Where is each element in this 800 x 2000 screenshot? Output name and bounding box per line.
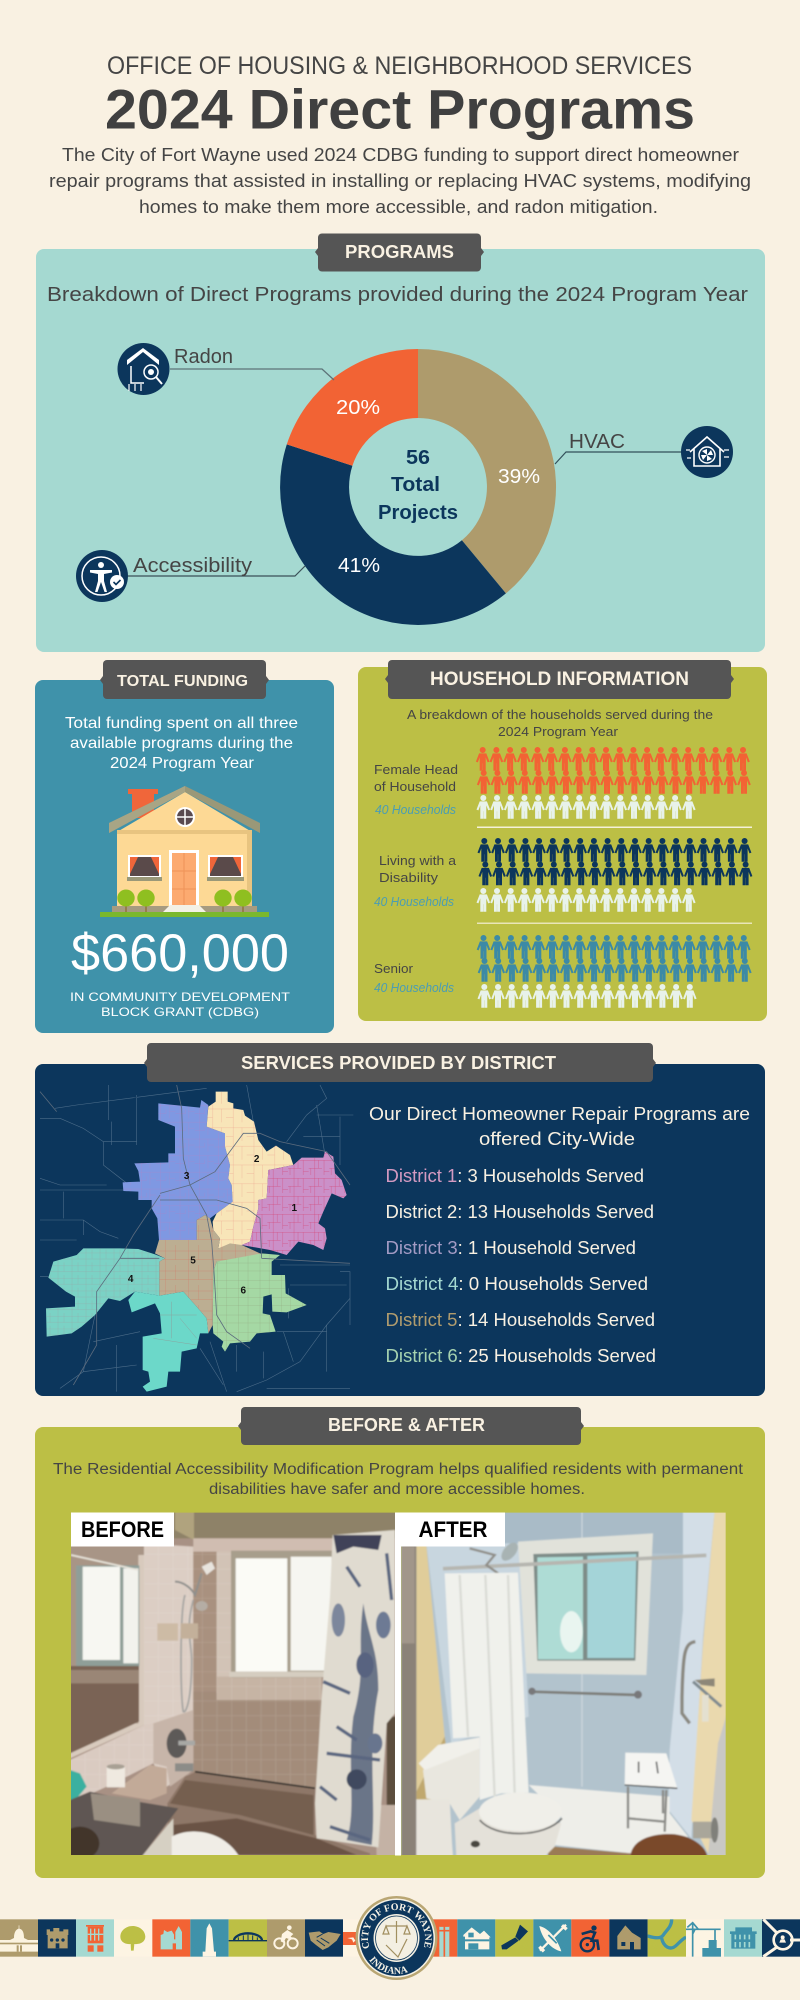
callout: accessibility xyxy=(76,550,305,602)
photo: after xyxy=(396,1510,728,1860)
pictogram: living with a disability xyxy=(476,838,752,912)
heading tag: services by district xyxy=(144,1043,656,1082)
funding source xyxy=(70,990,291,1019)
label: after xyxy=(396,1512,505,1546)
highways xyxy=(40,1085,350,1385)
district list: District 5: 14 Households Served xyxy=(386,1310,655,1330)
household description: 2024 Program Year xyxy=(498,724,619,739)
district numbers: 2 xyxy=(254,1154,260,1165)
label: before: BEFORE xyxy=(81,1517,164,1542)
row: senior: 40 Households xyxy=(374,980,454,995)
donut chart: Total xyxy=(391,474,440,496)
funding amount: $660,000 xyxy=(71,924,289,983)
district 5 xyxy=(155,1215,267,1333)
icon: hvac house xyxy=(681,426,733,478)
row: living with a disability xyxy=(374,838,752,912)
before and after description: disabilities have safer and more accessible homes. xyxy=(209,1481,585,1498)
before and after description: The Residential Accessibility Modification Program helps qualified residents with permanent xyxy=(53,1461,744,1478)
pictogram: female head of household xyxy=(476,747,751,819)
district numbers: 4 xyxy=(128,1274,134,1285)
donut chart: Projects xyxy=(378,502,458,524)
before and after description xyxy=(53,1461,744,1498)
row: female head of household: 40 Households xyxy=(375,802,456,817)
heading tag: household information xyxy=(385,660,734,699)
panel: programs xyxy=(36,234,765,652)
heading tag: before and after xyxy=(238,1407,584,1445)
district list: District 4: 0 Households Served xyxy=(386,1274,648,1294)
footer icon band xyxy=(0,1896,800,1980)
district 4 xyxy=(46,1248,208,1392)
household description xyxy=(407,707,713,739)
office name: OFFICE OF HOUSING & NEIGHBORHOOD SERVICES xyxy=(107,52,692,80)
photo gap xyxy=(395,1512,401,1856)
heading tag: total funding: TOTAL FUNDING xyxy=(117,673,248,690)
funding description: 2024 Program Year xyxy=(110,755,255,772)
pictogram: senior xyxy=(477,935,752,1008)
row: female head of household: Female Head xyxy=(374,762,458,777)
icon: accessibility person xyxy=(76,550,128,602)
city seal xyxy=(356,1896,438,1980)
funding source: IN COMMUNITY DEVELOPMENT xyxy=(70,990,291,1004)
heading tag: total funding xyxy=(100,660,269,699)
intro text: repair programs that assisted in installing or replacing HVAC systems, modifying xyxy=(49,171,751,191)
row: living with a disability: Disability xyxy=(379,870,439,885)
donut chart: 56 xyxy=(406,447,430,469)
left tiles xyxy=(0,1919,363,1957)
district list xyxy=(386,1166,656,1366)
row: female head of household: of Household xyxy=(374,779,456,794)
icon: house illustration xyxy=(100,786,269,917)
funding source: BLOCK GRANT (CDBG) xyxy=(101,1005,259,1019)
funding description: available programs during the xyxy=(70,735,293,752)
intro text xyxy=(49,145,751,217)
callout: radon xyxy=(118,343,334,395)
services description: offered City-Wide xyxy=(479,1129,635,1149)
district numbers xyxy=(128,1154,298,1296)
right tiles xyxy=(430,1919,800,1957)
callout: radon: Radon xyxy=(174,346,233,368)
heading tag: programs xyxy=(315,234,484,272)
services description: Our Direct Homeowner Repair Programs are xyxy=(369,1104,750,1124)
callout: accessibility: Accessibility xyxy=(133,555,252,577)
row: living with a disability: Living with a xyxy=(379,853,457,868)
heading tag: before and after: BEFORE & AFTER xyxy=(328,1415,485,1435)
district numbers: 6 xyxy=(241,1285,247,1296)
header xyxy=(49,52,751,217)
callout: hvac xyxy=(555,426,733,478)
donut chart: 39% xyxy=(498,466,540,488)
district list: District 3: 1 Household Served xyxy=(386,1238,636,1258)
row: female head of household xyxy=(374,747,751,819)
panel: before and after xyxy=(35,1407,765,1878)
donut chart: 41% xyxy=(338,555,380,577)
photo: before xyxy=(61,1510,400,1860)
row: living with a disability: 40 Households xyxy=(374,894,454,909)
heading tag: household information: HOUSEHOLD INFORMATION xyxy=(430,669,689,690)
panel: services by district xyxy=(35,1043,765,1396)
icon: radon house xyxy=(118,343,170,395)
city seal: INDIANA xyxy=(369,1956,408,1974)
intro text: homes to make them more accessible, and radon mitigation. xyxy=(139,197,658,217)
donut chart xyxy=(280,349,556,625)
panel: total funding xyxy=(35,660,334,1033)
heading tag: services by district: SERVICES PROVIDED BY DISTRICT xyxy=(241,1053,556,1073)
district numbers: 3 xyxy=(184,1171,190,1182)
label: before xyxy=(71,1512,174,1546)
intro text: The City of Fort Wayne used 2024 CDBG funding to support direct homeowner xyxy=(62,145,739,165)
district numbers: 5 xyxy=(190,1256,196,1267)
district list: District 1: 3 Households Served xyxy=(386,1166,644,1186)
panel: household information xyxy=(358,660,767,1021)
district 6 xyxy=(213,1253,307,1352)
household description: A breakdown of the households served during the xyxy=(407,707,713,722)
heading tag: programs: PROGRAMS xyxy=(345,242,454,262)
district numbers: 1 xyxy=(292,1203,298,1214)
district 2 xyxy=(207,1092,293,1248)
services description xyxy=(369,1104,750,1149)
funding description xyxy=(65,715,298,772)
label: after: AFTER xyxy=(418,1517,488,1542)
district 3 xyxy=(123,1100,233,1240)
district 1 xyxy=(242,1152,347,1255)
callout: hvac: HVAC xyxy=(569,431,625,453)
district list: District 2: 13 Households Served xyxy=(386,1202,654,1222)
funding description: Total funding spent on all three xyxy=(65,715,298,732)
city seal: CITY OF FORT WAYNE xyxy=(361,1903,432,1948)
title: 2024 Direct Programs xyxy=(105,78,695,140)
donut chart: 20% xyxy=(336,397,380,419)
row: senior xyxy=(374,935,752,1008)
district map xyxy=(40,1085,353,1392)
row: senior: Senior xyxy=(374,961,414,976)
district list: District 6: 25 Households Served xyxy=(386,1346,656,1366)
programs subtitle: Breakdown of Direct Programs provided during the 2024 Program Year xyxy=(47,284,748,306)
